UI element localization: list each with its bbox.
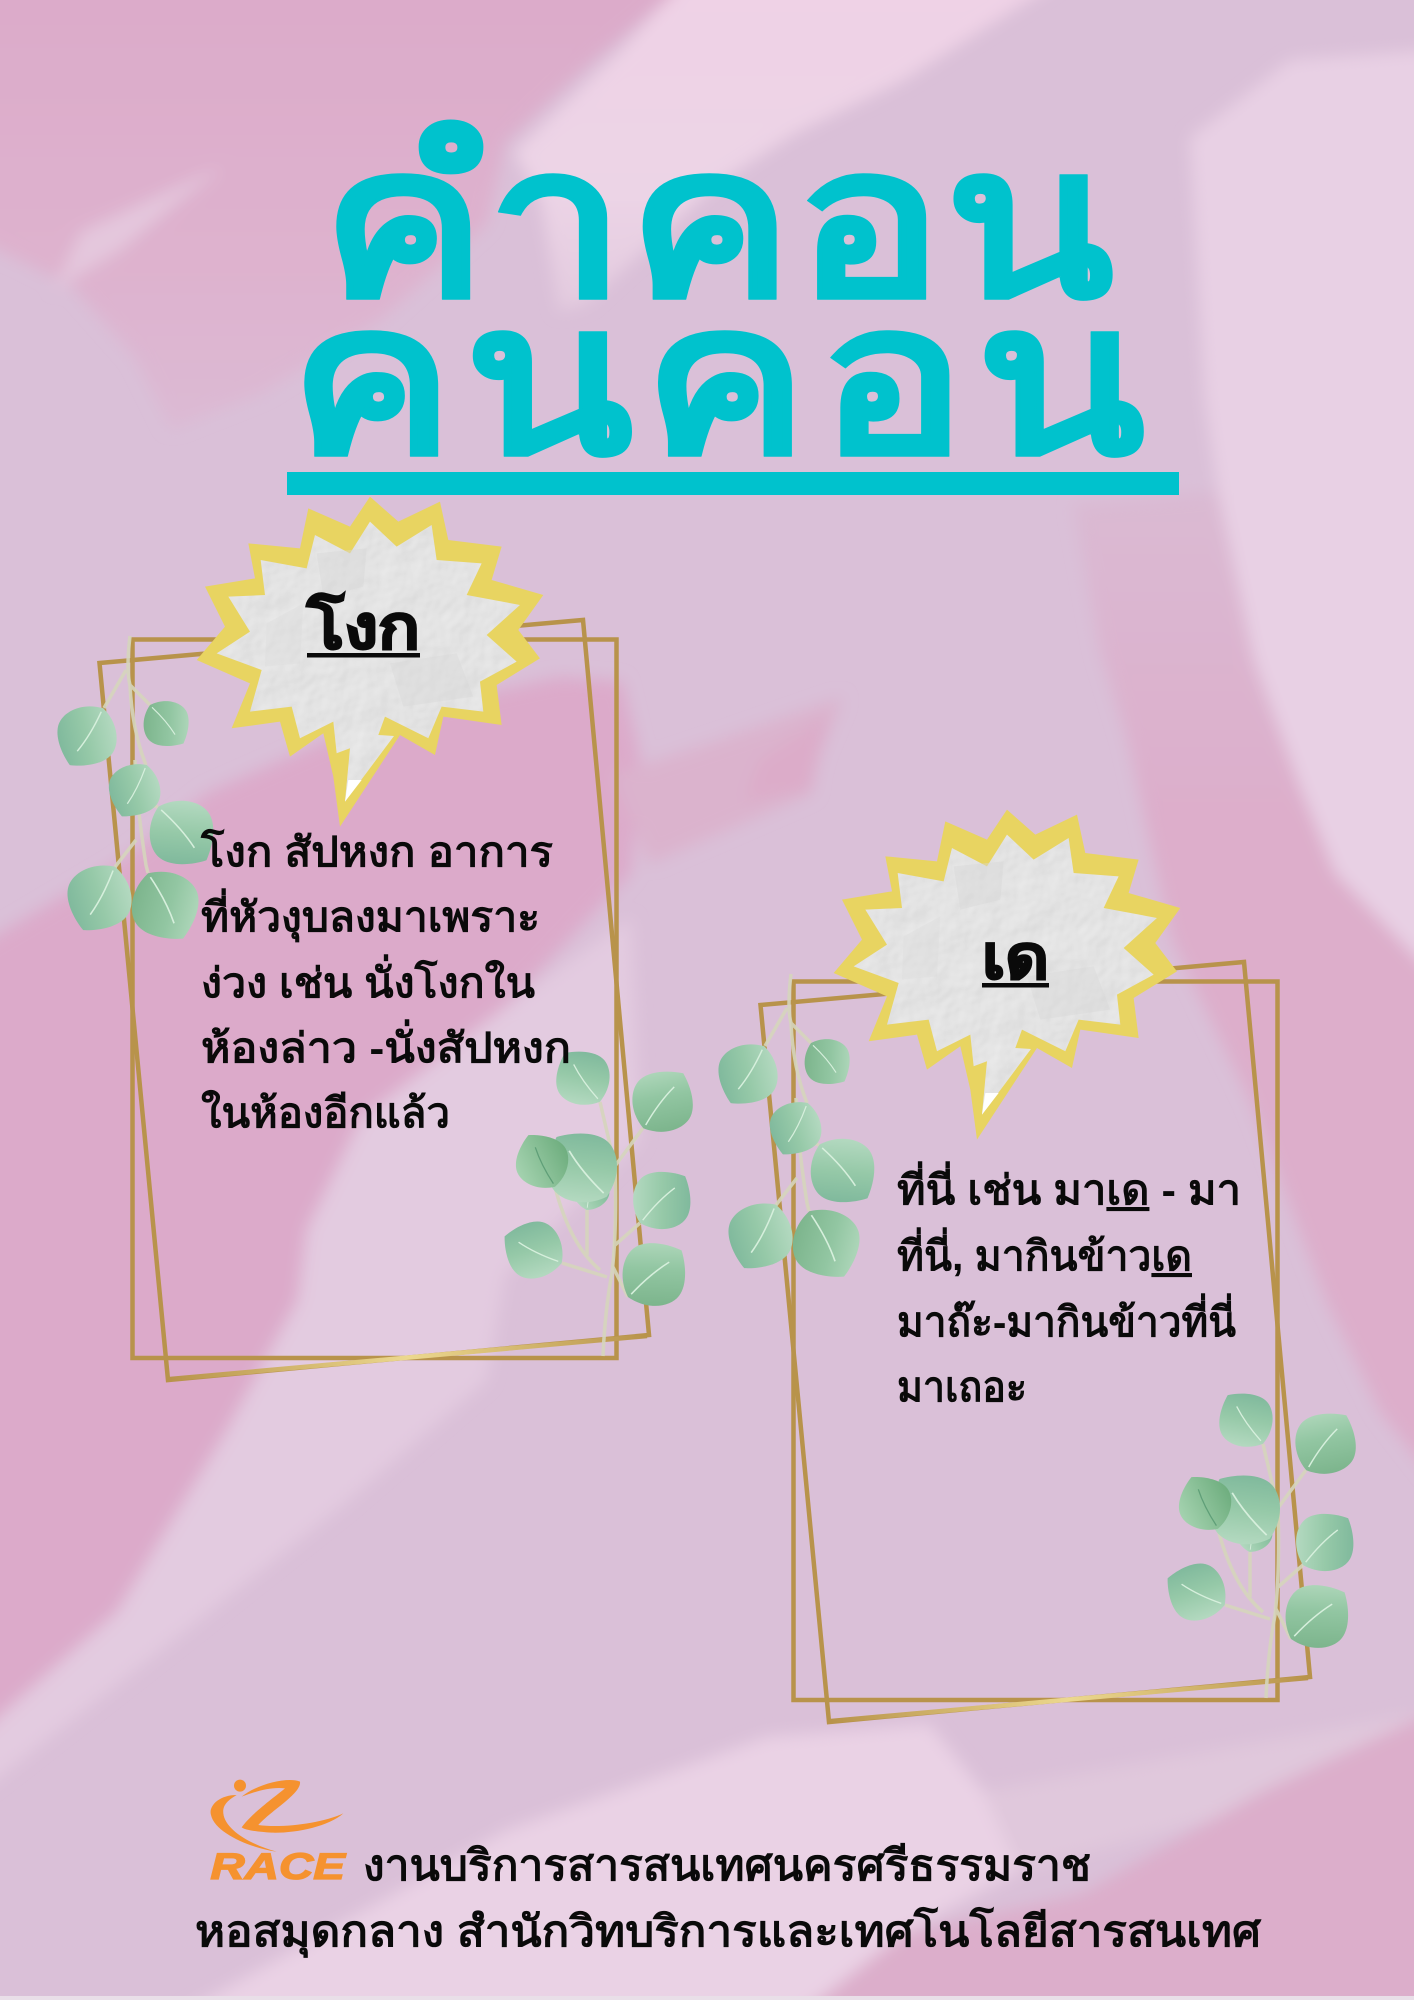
footer text: หอสมุดกลาง สำนักวิทบริการและเทศโนโลยีสารสนเทศ [195,1905,1262,1959]
definition text: ห้องล่าว -นั่งสัปหงก [201,1019,571,1071]
definition text: โงก สัปหงก อาการ [200,828,553,875]
icon: leaf sprig top left [704,974,892,1293]
gold double frame [100,620,649,1380]
icon: leaf sprig top left [43,636,231,955]
burst heading: โงก [306,592,420,661]
footer text [195,1842,1262,1959]
definition text: ที่นี่ เช่น มา เด - มา [897,1161,1241,1213]
definition text [200,828,571,1136]
gold double frame [760,962,1310,1722]
speech burst [197,497,543,827]
definition text: มาเถอะ [897,1364,1027,1410]
panel: โงก [43,497,709,1380]
definition text: ง่วง เช่น นั่งโงกใน [201,954,535,1006]
definition text: ที่นี่, มากินข้าวเด [897,1227,1192,1279]
logo: RACE [210,1780,346,1887]
logo: RACE: RACE [210,1845,346,1887]
definition text: มาถ๊ะ-มากินข้าวที่นี่ [897,1293,1236,1345]
icon: leaf sprig bottom right [492,1037,709,1356]
definition text [897,1161,1241,1410]
panel: เด [704,810,1372,1722]
speech burst [834,810,1180,1140]
definition text: ที่หัวงุบลงมาเพราะ [201,888,540,943]
definition text: ในห้องอีกแล้ว [201,1089,450,1136]
title line 2: คนคอน [289,261,1145,498]
title line 1: คำคอน [321,104,1114,341]
title [287,104,1179,498]
burst heading: เด [982,924,1049,991]
icon: leaf sprig bottom right [1155,1379,1372,1698]
footer text: งานบริการสารสนเทศนครศรีธรรมราช [363,1842,1091,1890]
title underline [287,472,1179,495]
